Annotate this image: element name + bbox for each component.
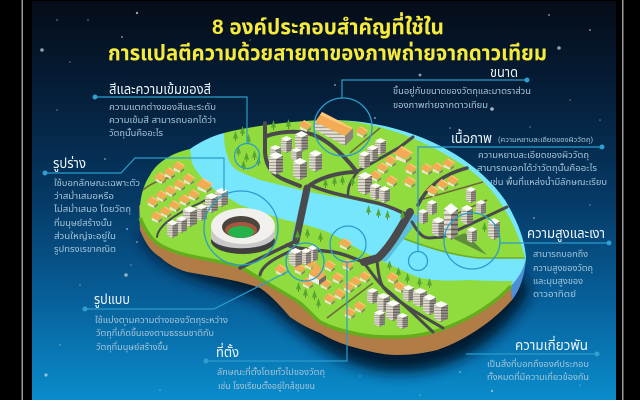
island: upper land shore [400, 237, 525, 258]
callout: shape: ที่มนุษย์สร้างนั้น [54, 217, 112, 228]
island: lower land [140, 149, 513, 337]
building shadow [452, 233, 487, 255]
island: upper land [224, 120, 525, 258]
callout: size: ขึ้นอยู่กับขนาดของวัตถุและมาตราส่วน [393, 85, 531, 97]
callout: size [314, 64, 531, 156]
island: blue river edge [511, 258, 526, 300]
callout: colour and tone [92, 81, 260, 168]
callout: shape [42, 155, 278, 265]
callout: shape: ว่าสม่ำเสมอหรือ [54, 190, 114, 201]
houses [146, 120, 459, 319]
callout: texture: (ความหยาบละเอียดของผิววัตถุ) [498, 136, 593, 145]
callout: location: ที่ตั้ง [216, 342, 239, 360]
callout: colour and tone: สีและความเข้มของสี [109, 81, 211, 97]
island: soil base [139, 205, 512, 355]
callout: pattern: วัตถุที่มนุษย์สร้างขึ้น [96, 341, 168, 352]
callout: texture: เนื้อภาพ [451, 128, 492, 146]
callout: colour and tone: วัตถุนั้นคืออะไร [109, 127, 163, 138]
callout: shape: ใช้บอกลักษณะเฉพาะตัว [54, 178, 140, 188]
callout: height and shadow: สามารถบอกถึง [533, 249, 588, 259]
callout: association: ทั้งหมดที่มีความเกี่ยวข้องกัน [487, 371, 589, 382]
title [108, 12, 547, 65]
callout: height and shadow: ความสูงและเงา [527, 225, 605, 242]
callout: size: ขนาด [490, 64, 518, 80]
roads and paths [143, 123, 507, 332]
buildings [167, 131, 500, 329]
island: river water [150, 120, 526, 325]
callout: location: ลักษณะที่ตั้งโดยทั่วไปของวัตถุ [217, 366, 325, 377]
callout: texture: ความหยาบละเอียดของผิววัตถุ [478, 150, 589, 160]
callout: height and shadow: ดาวอาทิตย์ [533, 289, 576, 299]
callout: size: ของภาพถ่ายจากดาวเทียม [393, 100, 488, 110]
callout: pattern [82, 243, 324, 352]
callout: texture: สามารถบอกได้ว่าวัตถุนั้นคืออะไร [477, 162, 597, 173]
callout: shape: รูปทรงเรขาคณิต [54, 244, 116, 255]
trees [233, 119, 487, 308]
callout: height and shadow: ความสูงของวัตถุ [533, 263, 593, 274]
callout: association: เป็นสิ่งที่บอกถึงองค์ประกอบ [487, 358, 589, 369]
callout: location: เช่น โรงเรียนตั้งอยู่ใกล้ชุมชน [218, 380, 315, 392]
island: dark grass rim [140, 218, 511, 337]
callout: shape: รูปร่าง [53, 155, 86, 172]
callout: texture [408, 128, 607, 270]
callout: association: ความเกี่ยวพัน [515, 335, 588, 353]
callout: height and shadow [444, 213, 612, 299]
stadium [211, 208, 275, 254]
large school building [315, 112, 353, 146]
callout: colour and tone: ความเข้มสี สามารถบอกได้ว่า [109, 115, 216, 125]
callout: shape: ส่วนใหญ่จะอยู่ใน [54, 231, 116, 242]
small office building in the lower land [309, 262, 326, 285]
callout: association [466, 335, 600, 382]
callout: location [204, 226, 366, 392]
callout: texture: เช่น พื้นที่แหล่งน้ำมีลักษณะเรียบ [490, 176, 607, 187]
island shadow [140, 220, 530, 372]
callout: pattern: วัตถุที่เกิดขึ้นเองตามธรรมชาติกับ [96, 327, 214, 338]
title: 8 องค์ประกอบสำคัญที่ใช้ใน [212, 12, 444, 39]
callout: height and shadow: และมุมสูงของ [533, 276, 583, 287]
title: การแปลตีความด้วยสายตาของภาพถ่ายจากดาวเทียม [108, 42, 547, 65]
callout: shape: ไม่สม่ำเสมอ โดยวัตถุ [53, 203, 131, 214]
callout: pattern: ใช้แบ่งตามความต่างของวัตถุระหว่าง [95, 315, 228, 325]
callout: pattern: รูปแบบ [94, 291, 130, 308]
callout: colour and tone: ความแตกต่างของสีและระดับ [109, 102, 216, 112]
